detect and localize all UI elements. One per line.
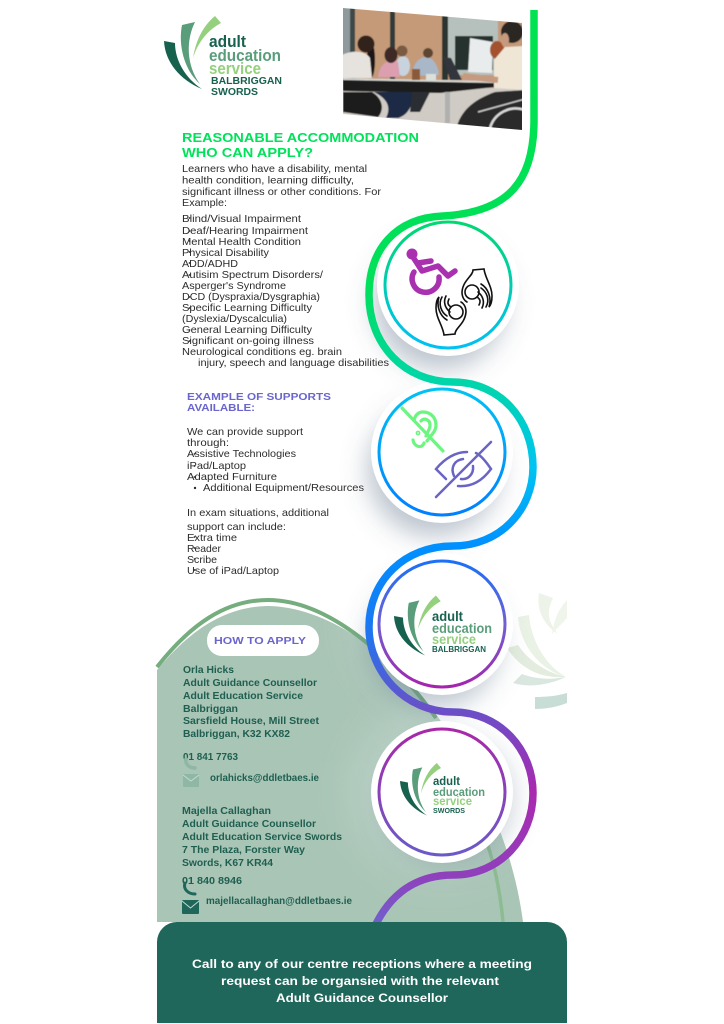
- list: conditions: Significant on-going illness: [182, 335, 314, 347]
- contact: Majella Callaghan: majellacallaghan@ddletbaes.ie: [206, 896, 352, 907]
- contact: Orla Hicks: Adult Education Service: [183, 691, 303, 702]
- list: conditions: (Dyslexia/Dyscalculia): [182, 313, 287, 325]
- icon: wheelchair: [406, 248, 455, 292]
- circle: Swords logo: SWORDS: [433, 808, 465, 815]
- text block: supports list: Assistive Technologies: [187, 448, 296, 460]
- list: conditions: Mental Health Condition: [182, 236, 301, 248]
- circle: Balbriggan logo: BALBRIGGAN: [432, 645, 486, 654]
- callout: call to reception: [157, 922, 567, 1023]
- logo: adult education service: SWORDS: [211, 87, 258, 98]
- text block: who can apply intro: significant illness or other conditions. For: [182, 186, 382, 198]
- contact: Orla Hicks: Orla Hicks: [183, 665, 234, 676]
- circle: Swords logo: [371, 721, 513, 863]
- contact: Orla Hicks: Adult Guidance Counsellor: [183, 678, 317, 689]
- button: how to apply: [207, 625, 319, 656]
- circle: Swords logo: adult: [433, 774, 460, 788]
- contact: Majella Callaghan: [182, 806, 352, 914]
- heading: example of supports: EXAMPLE OF SUPPORTS: [187, 391, 331, 403]
- text block: supports list: Additional Equipment/Resources: [203, 482, 364, 494]
- icon: ear crossed out: [402, 408, 443, 451]
- heading: example of supports: AVAILABLE:: [187, 402, 255, 414]
- list: conditions: Specific Learning Difficulty: [182, 302, 313, 314]
- circle shadows: [368, 237, 514, 866]
- list: conditions: DCD (Dyspraxia/Dysgraphia): [182, 291, 320, 303]
- text block: exam supports: Extra time: [187, 532, 237, 544]
- heading: reasonable accommodation: REASONABLE ACCOMMODATION: [182, 130, 419, 145]
- circle: accessibility icons: [377, 214, 519, 356]
- icon: signing hands: [436, 269, 492, 335]
- logo: adult education service: education: [209, 47, 281, 65]
- list: conditions: General Learning Difficulty: [182, 324, 313, 336]
- contact: Majella Callaghan: Majella Callaghan: [182, 806, 271, 817]
- list: conditions: ADD/ADHD: [182, 258, 238, 270]
- callout: call to reception: request can be organsied with the relevant: [221, 974, 499, 988]
- text block: supports list: We can provide support: [187, 426, 303, 438]
- list: conditions: Blind/Visual Impairment: [182, 213, 301, 225]
- circle: hearing and sight icons: [371, 381, 513, 523]
- infographic canvas: [156, 8, 567, 1023]
- contact: Majella Callaghan: 01 840 8946: [182, 876, 242, 887]
- text block: supports list: Adapted Furniture: [187, 471, 277, 483]
- text block: supports list: iPad/Laptop: [187, 460, 246, 472]
- contact: Orla Hicks: 01 841 7763: [183, 752, 238, 763]
- circle: Swords logo: education: [433, 785, 485, 799]
- list: conditions: Physical Disability: [182, 247, 270, 259]
- text block: exam supports: Reader: [187, 543, 221, 555]
- list: conditions: injury, speech and language disabilities: [198, 357, 389, 369]
- text block: exam supports: support can include:: [187, 521, 286, 533]
- callout: call to reception: Call to any of our centre receptions where a meeting: [192, 957, 532, 971]
- text block: exam supports: Scribe: [187, 554, 217, 566]
- circle: Balbriggan logo: education: [432, 620, 492, 636]
- heading: example of supports: [187, 391, 331, 414]
- heading: reasonable accommodation: [182, 130, 419, 160]
- photo: learners around a table: [343, 8, 522, 130]
- circle: Balbriggan logo: service: [432, 631, 476, 647]
- callout: call to reception: Adult Guidance Counsellor: [276, 991, 448, 1005]
- background: ghost logo swooshes: [507, 593, 567, 709]
- text block: exam supports: [187, 507, 329, 577]
- list: conditions: Deaf/Hearing Impairment: [182, 225, 308, 237]
- list: conditions: Asperger's Syndrome: [182, 280, 286, 292]
- text block: who can apply intro: Learners who have a disability, mental: [182, 163, 367, 175]
- button: how to apply: HOW TO APPLY: [214, 635, 306, 647]
- text block: who can apply intro: health condition, learning difficulty,: [182, 174, 354, 186]
- contact: Majella Callaghan: 7 The Plaza, Forster Way: [182, 845, 305, 856]
- contact: Orla Hicks: Sarsfield House, Mill Street: [183, 716, 320, 727]
- circle: Balbriggan logo: [371, 553, 513, 695]
- icon: eye crossed out: [436, 442, 491, 497]
- text block: supports list: through:: [187, 437, 229, 449]
- logo: adult education service: service: [209, 60, 261, 78]
- list: conditions: Neurological conditions eg. brain: [182, 346, 342, 358]
- logo: adult education service: adult: [209, 33, 246, 51]
- heading: reasonable accommodation: WHO CAN APPLY?: [182, 145, 313, 160]
- contact: Majella Callaghan: Adult Education Service Swords: [182, 832, 342, 843]
- logo: adult education service: [164, 16, 282, 98]
- panel: how to apply background: [156, 598, 523, 922]
- contact: Majella Callaghan: Swords, K67 KR44: [182, 858, 273, 869]
- text block: who can apply intro: Example:: [182, 197, 227, 209]
- list: conditions: Autisim Spectrum Disorders/: [182, 269, 323, 281]
- contact: Orla Hicks: Balbriggan, K32 KX82: [183, 729, 290, 740]
- circle: Swords logo: service: [433, 794, 472, 808]
- contact: Majella Callaghan: Adult Guidance Counsellor: [182, 819, 316, 830]
- circle: Balbriggan logo: adult: [432, 608, 463, 624]
- text block: exam supports: In exam situations, additional: [187, 507, 329, 519]
- contact: Orla Hicks: Balbriggan: [183, 704, 238, 715]
- contact: Orla Hicks: [183, 665, 320, 787]
- text block: who can apply intro: [182, 163, 382, 209]
- flowing gradient curve: [369, 10, 534, 926]
- logo: adult education service: BALBRIGGAN: [211, 76, 282, 87]
- text block: supports list: [187, 426, 364, 494]
- contact: Orla Hicks: orlahicks@ddletbaes.ie: [210, 773, 319, 784]
- list: conditions: [182, 213, 389, 369]
- text block: exam supports: Use of iPad/Laptop: [187, 565, 279, 577]
